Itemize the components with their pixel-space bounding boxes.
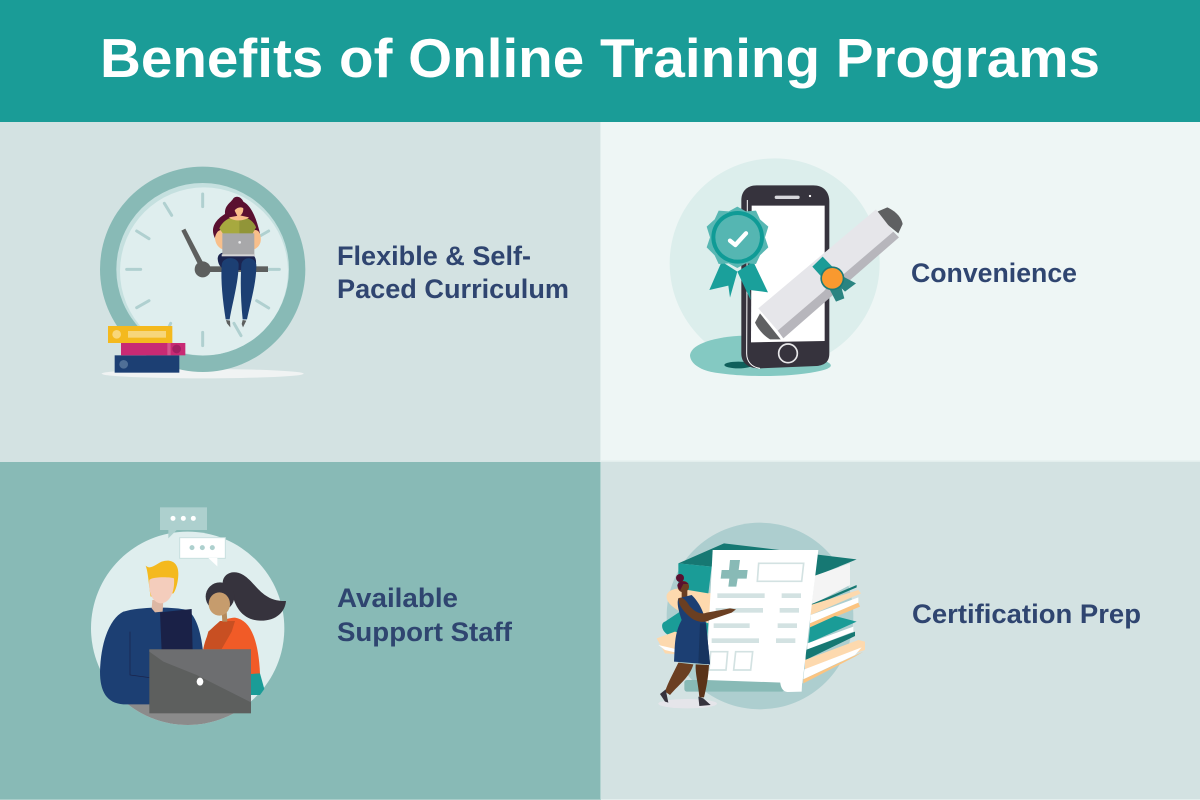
label: available support staff — [337, 583, 513, 647]
icon: phone with award ribbon and diploma — [670, 158, 903, 376]
icon: clock with woman on laptop and books — [100, 167, 305, 378]
label: available support staff: Support Staff — [337, 617, 513, 647]
panel: certification prep background — [600, 462, 1200, 800]
label: flexible and self-paced curriculum — [337, 241, 569, 304]
label: flexible and self-paced curriculum: Paced Curriculum — [337, 274, 569, 304]
icon: two people at a laptop with speech bubbles — [91, 507, 286, 728]
icon: woman holding document with stacked books — [657, 523, 865, 709]
label: convenience: Convenience — [911, 258, 1077, 288]
label: flexible and self-paced curriculum: Flexible & Self- — [337, 241, 531, 271]
label: certification prep: Certification Prep — [912, 599, 1141, 629]
panel: flexible curriculum background — [0, 122, 600, 462]
title: Benefits of Online Training Programs — [100, 27, 1100, 89]
panel: convenience background — [600, 122, 1200, 462]
label: available support staff: Available — [337, 583, 458, 613]
panel: support staff background — [0, 462, 600, 800]
panel: header banner — [0, 0, 1200, 122]
